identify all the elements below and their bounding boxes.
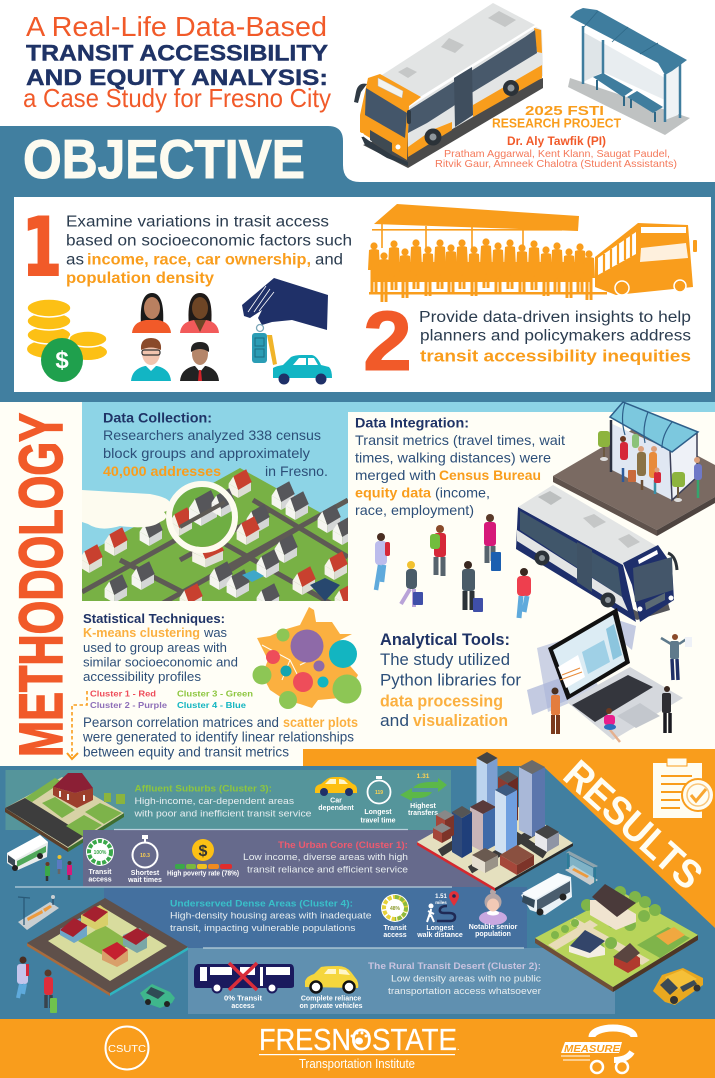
cluster legend: Cluster 1 - Red	[90, 688, 156, 698]
urban core text: The Urban Core (Cluster 1):	[278, 840, 408, 851]
analytical tools text: Analytical Tools:	[380, 631, 510, 649]
icon: people	[131, 293, 219, 381]
objective 1 text: as	[66, 252, 84, 268]
icon: longest walk distance: walk distance	[416, 932, 463, 939]
illustration: navy bus	[516, 485, 677, 622]
panel: objective content	[14, 197, 711, 392]
illustration: rural homestead	[535, 884, 698, 992]
statistical techniques text: similar socioeconomic and	[83, 654, 238, 670]
objective 1 text: and	[315, 252, 343, 268]
cluster legend: Cluster 3 - Green	[177, 688, 253, 698]
objective 2 text: Provide data-driven insights to help	[419, 309, 691, 326]
underserved text: Underserved Dense Areas (Cluster 4):	[170, 898, 353, 910]
icon: senior population: Notable senior	[469, 924, 518, 931]
illustration: dense neighborhood	[27, 898, 188, 996]
number 1: 1	[22, 201, 62, 294]
icon: transit access 100%: 100%	[94, 850, 107, 856]
panel: underserved dense areas	[104, 887, 527, 948]
footer	[0, 1019, 715, 1078]
icon: transit access 100%: Transit	[89, 869, 112, 876]
heading: objective: OBJECTIVE	[23, 128, 305, 190]
objective 1 text: population density	[66, 270, 214, 287]
icon: longest walk distance	[416, 891, 463, 939]
urban core text: Low income, diverse areas with high	[243, 852, 408, 863]
rural text: transportation access whatsoever	[388, 986, 541, 997]
statistical techniques text	[83, 611, 238, 684]
data collection text: in Fresno.	[265, 463, 328, 479]
icon: longest travel time	[360, 776, 396, 824]
heading: methodology: METHODOLOGY	[7, 413, 75, 757]
illustration: suburban house	[5, 773, 125, 852]
illustration: small shelter	[565, 851, 598, 885]
analytical tools text: Python libraries for	[380, 672, 522, 690]
illustration: white bus	[521, 873, 572, 916]
pearson correlation text: Pearson correlation matrices and	[83, 715, 279, 730]
logo: Fresno State	[259, 1022, 460, 1071]
illustration: laptop with analysts	[527, 608, 692, 742]
dividers	[15, 830, 524, 948]
statistical techniques text: accessibility profiles	[83, 669, 202, 684]
icon: longest travel time: Longest	[364, 809, 392, 816]
icon: transit access 100%	[86, 838, 114, 884]
logo: Fresno State: .	[457, 1042, 460, 1052]
cluster legend: Cluster 4 - Blue	[177, 700, 246, 710]
icon: transit access 48%	[381, 894, 409, 939]
illustration: travellers walking	[375, 514, 531, 618]
rural text	[368, 961, 541, 997]
cluster map	[252, 607, 362, 709]
title: AND EQUITY ANALYSIS:	[26, 65, 328, 90]
illustration: neighborhood under magnifier	[80, 402, 358, 613]
statistical techniques text: Statistical Techniques:	[83, 611, 225, 626]
panel: urban core	[83, 830, 503, 887]
pearson correlation text: were generated to identify linear relationships	[82, 730, 354, 744]
panel: results background	[0, 749, 715, 1019]
icon: senior population: population	[475, 931, 511, 938]
pearson correlation text: scatter plots	[283, 715, 358, 730]
underserved text	[170, 898, 372, 934]
icon: high poverty rate: $	[199, 843, 208, 860]
data integration text: merged with	[355, 467, 436, 483]
title: TRANSIT ACCESSIBILITY	[26, 40, 328, 66]
rural text: Low density areas with no public	[391, 974, 541, 984]
icon: no bus: access	[231, 1003, 255, 1010]
icon: hand	[82, 490, 170, 529]
objective 1 text	[66, 214, 352, 287]
panel: objective	[0, 126, 715, 403]
project credits: Ritvik Gaur, Amneek Chalotra (Student Assistants)	[435, 158, 677, 170]
icon: highest transfers: transfers	[408, 810, 438, 817]
objective 2 text: transit accessibility inequities	[420, 346, 691, 366]
pearson correlation text: between equity and transit metrics	[83, 744, 289, 760]
affluent suburbs text: with poor and inefficient transit service	[133, 808, 312, 820]
data collection text: block groups and approximately	[103, 445, 310, 461]
icon: magnifier	[169, 484, 235, 550]
icon: high poverty rate: High poverty rate (78%)	[167, 870, 239, 878]
illustration: city skyline	[417, 752, 573, 891]
underserved text: transit, impacting vulnerable populations	[170, 923, 356, 934]
icon: transit access 48%: 48%	[390, 906, 401, 912]
illustration: green bus and riders	[7, 835, 72, 881]
urban core text: transit reliance and efficient service	[247, 864, 408, 876]
icon: transit access 48%: access	[383, 932, 407, 939]
icon: senior population	[469, 889, 518, 938]
data integration text: equity data	[355, 484, 431, 500]
icon: yellow car: Complete reliance	[301, 996, 361, 1002]
objective 1 text: based on socioeconomic factors such	[66, 232, 352, 250]
icon: crowd at bus stop	[368, 204, 697, 302]
icon: clipboard	[653, 758, 714, 818]
icon: highest transfers: Highest	[410, 803, 437, 810]
icon: yellow car: on private vehicles	[299, 1003, 363, 1010]
logo: Fresno State: Transportation Institute	[299, 1057, 415, 1071]
data collection text: Researchers analyzed 338 census	[103, 427, 321, 443]
icon: coins	[27, 299, 107, 382]
project credits: Dr. Aly Tawfik (PI)	[507, 134, 606, 148]
icon: transit access 100%: access	[88, 876, 112, 884]
panel: methodology	[0, 402, 715, 766]
project credits: Pratham Aggarwal, Kent Klann, Saugat Paudel,	[444, 148, 670, 160]
objective 1 text: income, race, car ownership,	[87, 252, 311, 268]
icon: shortest wait times	[127, 835, 162, 884]
panel: affluent suburbs	[5, 770, 451, 852]
pearson correlation text	[82, 715, 358, 760]
icon: car dependent: dependent	[318, 805, 354, 812]
arrow: dashed to results	[67, 691, 87, 759]
illustration: travellers and green car	[17, 956, 175, 1013]
analytical tools text: and	[380, 712, 409, 730]
project credits: RESEARCH PROJECT	[492, 116, 621, 130]
icon: high poverty rate	[167, 839, 239, 878]
data collection text: Data Collection:	[103, 410, 212, 426]
number 2: 2	[363, 294, 412, 388]
analytical tools text: The study utilized	[380, 651, 510, 669]
icon: bus shelter	[568, 8, 690, 135]
icon: longest travel time: 119	[375, 790, 383, 796]
illustration: yellow car	[653, 968, 703, 1005]
objective 1 text: Examine variations in trasit access	[66, 214, 329, 230]
data collection text: 40,000 addresses	[103, 463, 221, 479]
data integration text: Census Bureau	[439, 467, 541, 483]
analytical tools text: visualization	[413, 712, 508, 730]
statistical techniques text: used to group areas with	[83, 640, 227, 655]
affluent suburbs text	[133, 784, 312, 820]
data integration text: (income,	[435, 484, 490, 500]
title: A Real-Life Data-Based	[26, 11, 327, 42]
icon: shortest wait times: 10.3	[140, 853, 150, 859]
logo: CSUTC: CSUTC	[108, 1043, 146, 1055]
logo: Fresno State: STATE	[372, 1022, 457, 1057]
logo: Measure C	[561, 1028, 634, 1073]
icon: yellow car	[299, 966, 363, 1010]
icon: longest walk distance: 1.51	[435, 894, 447, 900]
analytical tools text	[380, 631, 522, 730]
affluent suburbs text: Affluent Suburbs (Cluster 3):	[134, 784, 272, 794]
data integration text: times, walking distances) were	[355, 450, 551, 466]
icon: shortest wait times: Shortest	[131, 870, 160, 877]
illustration: platform bench and lamp	[18, 895, 59, 930]
project credits: 2025 FSTI	[525, 103, 604, 118]
icon: longest walk distance: miles	[435, 900, 447, 905]
icon: no bus: 0% Transit	[224, 996, 263, 1002]
logo: Fresno State: FRESNO	[259, 1022, 372, 1057]
icon: longest walk distance: Longest	[426, 925, 454, 932]
icon: shortest wait times: wait times	[127, 877, 162, 884]
statistical techniques text: K-means clustering	[83, 625, 200, 640]
statistical techniques text: was	[203, 625, 227, 640]
data integration text: Transit metrics (travel times, wait	[355, 432, 565, 448]
icon: no bus	[194, 963, 294, 1010]
data collection text	[103, 410, 328, 479]
data integration text: Data Integration:	[355, 414, 469, 430]
icon: car dependent: Car	[330, 798, 342, 804]
cluster legend: Cluster 2 - Purple	[90, 700, 167, 710]
panel: rural transit desert	[188, 948, 615, 1014]
project credits	[435, 103, 677, 170]
rural text: The Rural Transit Desert (Cluster 2):	[368, 961, 541, 972]
icon: car dependent	[315, 777, 357, 812]
icon: coins: $	[55, 347, 69, 374]
affluent suburbs text: High-income, car-dependent areas	[134, 796, 294, 807]
title	[23, 11, 331, 113]
objective 2 text: planners and policymakers address	[420, 328, 691, 344]
data integration text: race, employment)	[355, 502, 474, 518]
icon: highest transfers	[400, 773, 447, 817]
icon: hand holding keys and car	[242, 278, 332, 384]
logo: Measure C: MEASURE	[564, 1043, 621, 1055]
objective 2 text	[419, 309, 691, 366]
icon: longest travel time: travel time	[360, 818, 396, 824]
urban core text	[243, 840, 408, 876]
title: a Case Study for Fresno City	[23, 83, 331, 113]
underserved text: High-density housing areas with inadequate	[170, 910, 372, 922]
icon: orange bus	[354, 3, 543, 168]
analytical tools text: data processing	[380, 692, 503, 710]
data integration text	[355, 414, 565, 518]
logo: CSUTC	[106, 1026, 148, 1070]
icon: transit access 48%: Transit	[384, 925, 407, 932]
illustration: glass bus stop platform	[553, 402, 715, 536]
icon: highest transfers: 1.31	[417, 773, 430, 780]
cluster legend	[90, 688, 253, 710]
